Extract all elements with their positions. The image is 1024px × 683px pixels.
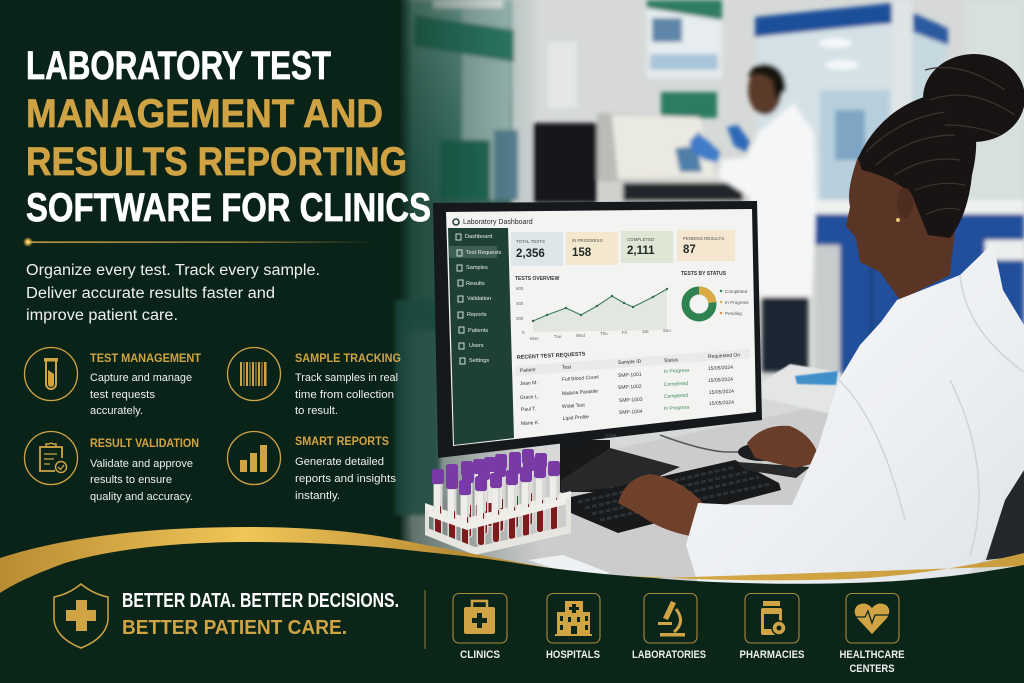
sidebar: Patients: [468, 328, 488, 334]
man in lab coat: [762, 290, 808, 372]
table: recent test requests: [515, 349, 750, 427]
summary cards: TOTAL TESTS: [516, 239, 545, 244]
computer keyboard: [571, 460, 781, 533]
table: recent test requests: In Progress: [664, 405, 690, 412]
feature: smart reports: instantly.: [295, 490, 340, 502]
table: recent test requests: 15/05/2024: [709, 400, 734, 407]
audience: hospitals: HOSPITALS: [546, 649, 600, 661]
audience: healthcare centers: [840, 594, 904, 675]
sidebar: Reports: [467, 312, 487, 318]
line chart: tests overview: Tue: [554, 334, 562, 339]
sidebar: Test Requests: [466, 250, 502, 256]
audience: healthcare centers: HEALTHCARE: [840, 649, 904, 661]
icon: clipboard check: [24, 432, 78, 484]
hair and bun: [858, 54, 1024, 238]
table: recent test requests: Completed: [664, 381, 688, 388]
donut chart: tests by status: Completed: [725, 289, 748, 294]
audience: clinics: CLINICS: [460, 649, 500, 661]
table: recent test requests: Sample ID: [618, 359, 642, 366]
table: recent test requests: Patient: [520, 367, 536, 374]
icon: bar chart: [228, 432, 280, 484]
title: MANAGEMENT AND: [26, 92, 383, 136]
panel overlay: dark green gradient: [0, 0, 540, 683]
table: recent test requests: Full Blood Count: [562, 374, 600, 383]
neck and face: [846, 157, 955, 300]
feature: test management: TEST MANAGEMENT: [90, 351, 202, 365]
icon: shield with cross: [54, 584, 108, 648]
lower door shadow: [395, 300, 440, 515]
intro paragraph: improve patient care.: [26, 307, 178, 324]
line chart: tests overview: 0: [522, 330, 525, 335]
summary cards: PENDING RESULTS: [683, 236, 724, 241]
icon: test tube: [24, 348, 78, 400]
line chart: tests overview: Wed: [576, 333, 586, 338]
tagline: BETTER PATIENT CARE.: [122, 617, 347, 639]
desk: [380, 400, 850, 600]
monitor with dashboard: DGM: [605, 433, 617, 440]
feature: test management: accurately.: [90, 405, 143, 417]
audience: laboratories: [632, 594, 706, 661]
table: recent test requests: SMP-1004: [619, 409, 643, 416]
analyzer machine: [533, 123, 597, 203]
sidebar: Settings: [469, 358, 489, 364]
summary cards: IN PROGRESS: [572, 238, 603, 243]
audience: healthcare centers: CENTERS: [850, 663, 894, 675]
monitor stand: [560, 440, 680, 493]
table: recent test requests: SMP-1002: [618, 384, 642, 391]
blurred back wall scene: [400, 0, 1024, 375]
line chart: tests overview: 600: [516, 286, 524, 291]
monitor cable: [660, 435, 745, 452]
feature: smart reports: SMART REPORTS: [295, 434, 389, 448]
computer mouse and pad: [737, 443, 810, 478]
line chart: tests overview: Sat: [642, 329, 649, 334]
feature: smart reports: Generate detailed: [295, 456, 384, 468]
donut chart: tests by status: In Progress: [725, 300, 749, 305]
audience: pharmacies: [740, 594, 804, 661]
intro paragraph: [26, 262, 320, 324]
line chart: tests overview: Thu: [600, 331, 608, 336]
table: recent test requests: Grace L.: [520, 394, 539, 401]
audience: laboratories: LABORATORIES: [632, 649, 706, 661]
table: recent test requests: Marie K.: [521, 420, 540, 427]
sidebar: [448, 219, 533, 445]
feature: sample tracking: to result.: [295, 405, 338, 417]
table: recent test requests: Status: [664, 357, 679, 364]
summary cards: COMPLETED: [627, 237, 654, 242]
feature: result validation: RESULT VALIDATION: [90, 436, 199, 450]
hand on keyboard: [618, 474, 705, 536]
feature: result validation: Validate and approve: [90, 458, 193, 470]
table: recent test requests: Widal Test: [562, 402, 586, 410]
icon: medicine bottle: [745, 594, 799, 643]
feature: test management: [24, 348, 202, 417]
sidebar: Samples: [466, 265, 488, 271]
feature: sample tracking: time from collection: [295, 389, 394, 401]
intro paragraph: Organize every test. Track every sample.: [26, 262, 320, 279]
hand on mouse: [747, 426, 820, 468]
table: recent test requests: Test: [562, 364, 572, 371]
donut chart: tests by status: [681, 271, 749, 318]
gold wave band: [0, 527, 1024, 600]
line chart: tests overview: Fri: [622, 330, 627, 335]
title: RESULTS REPORTING: [26, 140, 407, 184]
feature: test management: test requests: [90, 389, 156, 401]
sidebar: Results: [466, 281, 485, 287]
audience: hospitals: [546, 594, 600, 661]
icon: medical bag: [453, 594, 507, 643]
line chart: tests overview: Mon: [530, 336, 539, 341]
audience: pharmacies: PHARMACIES: [740, 649, 804, 661]
sidebar: Validation: [467, 296, 491, 302]
table: recent test requests: 15/05/2024: [708, 377, 733, 384]
sidebar: Laboratory Dashboard: [463, 219, 533, 226]
paper on desk: [528, 555, 610, 578]
line chart: tests overview: Sun: [663, 328, 671, 333]
desk tray: [762, 364, 840, 415]
feature: result validation: [24, 432, 199, 503]
intro paragraph: Deliver accurate results faster and: [26, 285, 275, 302]
divider: [424, 590, 426, 649]
table: recent test requests: Lipid Profile: [563, 414, 589, 422]
table: recent test requests: In Progress: [664, 368, 690, 375]
feature: sample tracking: SAMPLE TRACKING: [295, 351, 401, 365]
icon: barcode: [228, 348, 280, 400]
table: recent test requests: RECENT TEST REQUESTS: [517, 351, 586, 361]
bottom dark band: [0, 542, 1024, 683]
table: recent test requests: 15/05/2024: [708, 365, 733, 372]
title divider: [23, 237, 373, 247]
table: recent test requests: Malaria Parasite: [562, 388, 598, 397]
donut chart: tests by status: TESTS BY STATUS: [681, 271, 727, 277]
line chart: tests overview: TESTS OVERVIEW: [515, 276, 560, 282]
summary cards: [511, 230, 735, 266]
icon: heart with pulse: [846, 594, 899, 643]
summary cards: 87: [683, 244, 696, 256]
icon: hospital building: [547, 594, 600, 643]
icon: microscope: [644, 594, 697, 643]
line chart: tests overview: 400: [516, 301, 524, 306]
tagline: [122, 590, 399, 639]
table: recent test requests: Jean M.: [520, 380, 538, 387]
table: recent test requests: SMP-1001: [618, 372, 642, 379]
feature: result validation: results to ensure: [90, 474, 172, 486]
feature: result validation: quality and accuracy.: [90, 491, 193, 503]
title: SOFTWARE FOR CLINICS: [26, 186, 431, 230]
line chart: tests overview: 200: [516, 316, 524, 321]
woman in lab coat: [618, 54, 1024, 590]
line chart: tests overview: [515, 276, 671, 341]
feature: test management: Capture and manage: [90, 372, 192, 384]
tagline: BETTER DATA. BETTER DECISIONS.: [122, 590, 399, 612]
feature: sample tracking: Track samples in real: [295, 372, 398, 384]
summary cards: 2,111: [627, 245, 655, 257]
title: LABORATORY TEST: [26, 44, 331, 88]
feature: smart reports: reports and insights: [295, 473, 397, 485]
donut chart: tests by status: Pending: [725, 311, 742, 316]
feature: smart reports: [228, 432, 397, 502]
table: recent test requests: 15/05/2024: [709, 389, 734, 396]
title: [26, 44, 431, 230]
chair: [986, 470, 1024, 560]
audience: clinics: [453, 594, 507, 661]
sidebar: Dashboard: [465, 234, 492, 240]
feature: sample tracking: [228, 348, 401, 417]
blood sample tube rack: [425, 449, 571, 555]
lab coat: [686, 243, 1024, 590]
summary cards: 2,356: [516, 248, 545, 260]
table: recent test requests: Completed: [664, 393, 688, 400]
table: recent test requests: Paul T.: [521, 406, 536, 413]
monitor with dashboard: [433, 201, 762, 458]
table: recent test requests: SMP-1003: [619, 397, 643, 404]
sidebar: Users: [469, 343, 484, 349]
table: recent test requests: Requested On: [708, 352, 741, 360]
summary cards: 158: [572, 247, 592, 259]
